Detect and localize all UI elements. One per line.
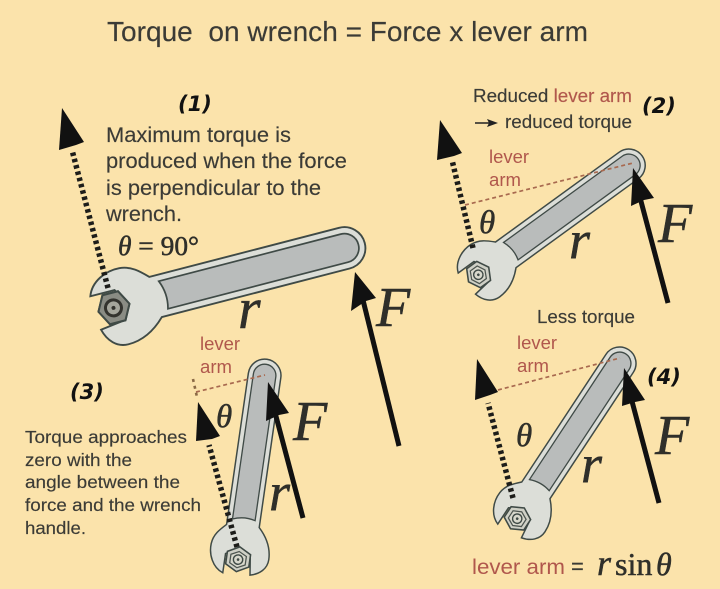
text: reduced lever arm: Reduced lever arm: [473, 85, 632, 106]
label: lever arm: lever: [200, 334, 240, 354]
arrow: rotated force direction: [475, 359, 513, 498]
icon: wrench 3: [207, 355, 297, 579]
formula: lever arm = r sin theta: θ: [656, 546, 672, 582]
formula: lever arm = r sin theta: [472, 543, 672, 583]
label: (3): (3): [70, 380, 104, 404]
label: F: F: [657, 193, 693, 255]
label: lever arm: [200, 334, 240, 377]
label: theta: θ: [216, 399, 232, 435]
text: torque approaches zero: handle.: [25, 518, 86, 538]
label: lever arm: [517, 333, 557, 376]
label: r: r: [269, 462, 291, 522]
icon: small arrow: [475, 119, 498, 127]
label: theta: θ: [516, 418, 532, 454]
text: torque approaches zero: angle between the: [25, 472, 180, 492]
text: torque approaches zero: force and the wrench: [25, 495, 201, 515]
formula: lever arm = r sin theta: =: [571, 554, 584, 579]
label: F: F: [375, 277, 411, 339]
dotted extension above arrowhead: [193, 379, 197, 397]
label: (2): (2): [642, 94, 676, 118]
panel 2: reduced lever arm: [437, 85, 693, 308]
panel 3: torque approaches zero: [25, 334, 328, 579]
text: torque approaches zero: zero with the: [25, 450, 132, 470]
arrow: force F: [622, 368, 659, 503]
label: lever arm: lever: [489, 147, 529, 167]
label: r: r: [581, 434, 603, 494]
label: lever arm: [489, 147, 529, 190]
label: lever arm: lever: [517, 333, 557, 353]
label: r: r: [569, 210, 591, 270]
text: maximum torque explanation: is perpendicular to the: [106, 176, 321, 200]
lever arm dashed line: [498, 358, 620, 390]
label: r: r: [238, 276, 261, 341]
label: lever arm: arm: [517, 356, 549, 376]
text: torque approaches zero: Torque approaches: [25, 427, 187, 447]
angle label: theta = 90: θ = 90°: [118, 231, 199, 261]
label: (4): (4): [647, 365, 681, 389]
arrow: rotated force direction: [196, 402, 237, 547]
icon: wrench 2: [449, 132, 660, 308]
text: torque approaches zero: [25, 427, 201, 538]
arrow: rotated force direction: [59, 108, 108, 288]
text: reduced torque: reduced torque: [505, 111, 632, 132]
icon: wrench 4: [485, 334, 654, 548]
text: less torque: Less torque: [537, 306, 635, 327]
panel 1: maximum torque: [59, 108, 411, 446]
formula: lever arm = r sin theta: lever arm: [472, 556, 565, 579]
text: maximum torque explanation: produced when the force: [106, 149, 347, 173]
text: maximum torque explanation: wrench.: [105, 202, 182, 226]
text: maximum torque explanation: [105, 123, 347, 226]
label: (1): (1): [178, 92, 212, 116]
panel 4: less torque: [472, 306, 690, 583]
label: theta: θ: [479, 205, 495, 241]
arrow: rotated force direction: [437, 120, 473, 248]
arrow: force F: [266, 382, 303, 518]
lever arm dashed line: [196, 375, 265, 392]
arrow: force F: [351, 272, 399, 446]
arrow: force F: [631, 168, 668, 303]
formula: lever arm = r sin theta: r: [597, 543, 612, 583]
icon: wrench 1: [85, 207, 374, 351]
label: F: F: [292, 391, 328, 453]
formula: lever arm = r sin theta: sin: [615, 546, 652, 582]
title: Torque on wrench = Force x lever arm: [107, 16, 588, 47]
label: lever arm: arm: [200, 357, 232, 377]
label: F: F: [654, 405, 690, 467]
label: lever arm: arm: [489, 170, 521, 190]
lever arm dashed line: [465, 163, 633, 205]
text: maximum torque explanation: Maximum torque is: [106, 123, 291, 147]
